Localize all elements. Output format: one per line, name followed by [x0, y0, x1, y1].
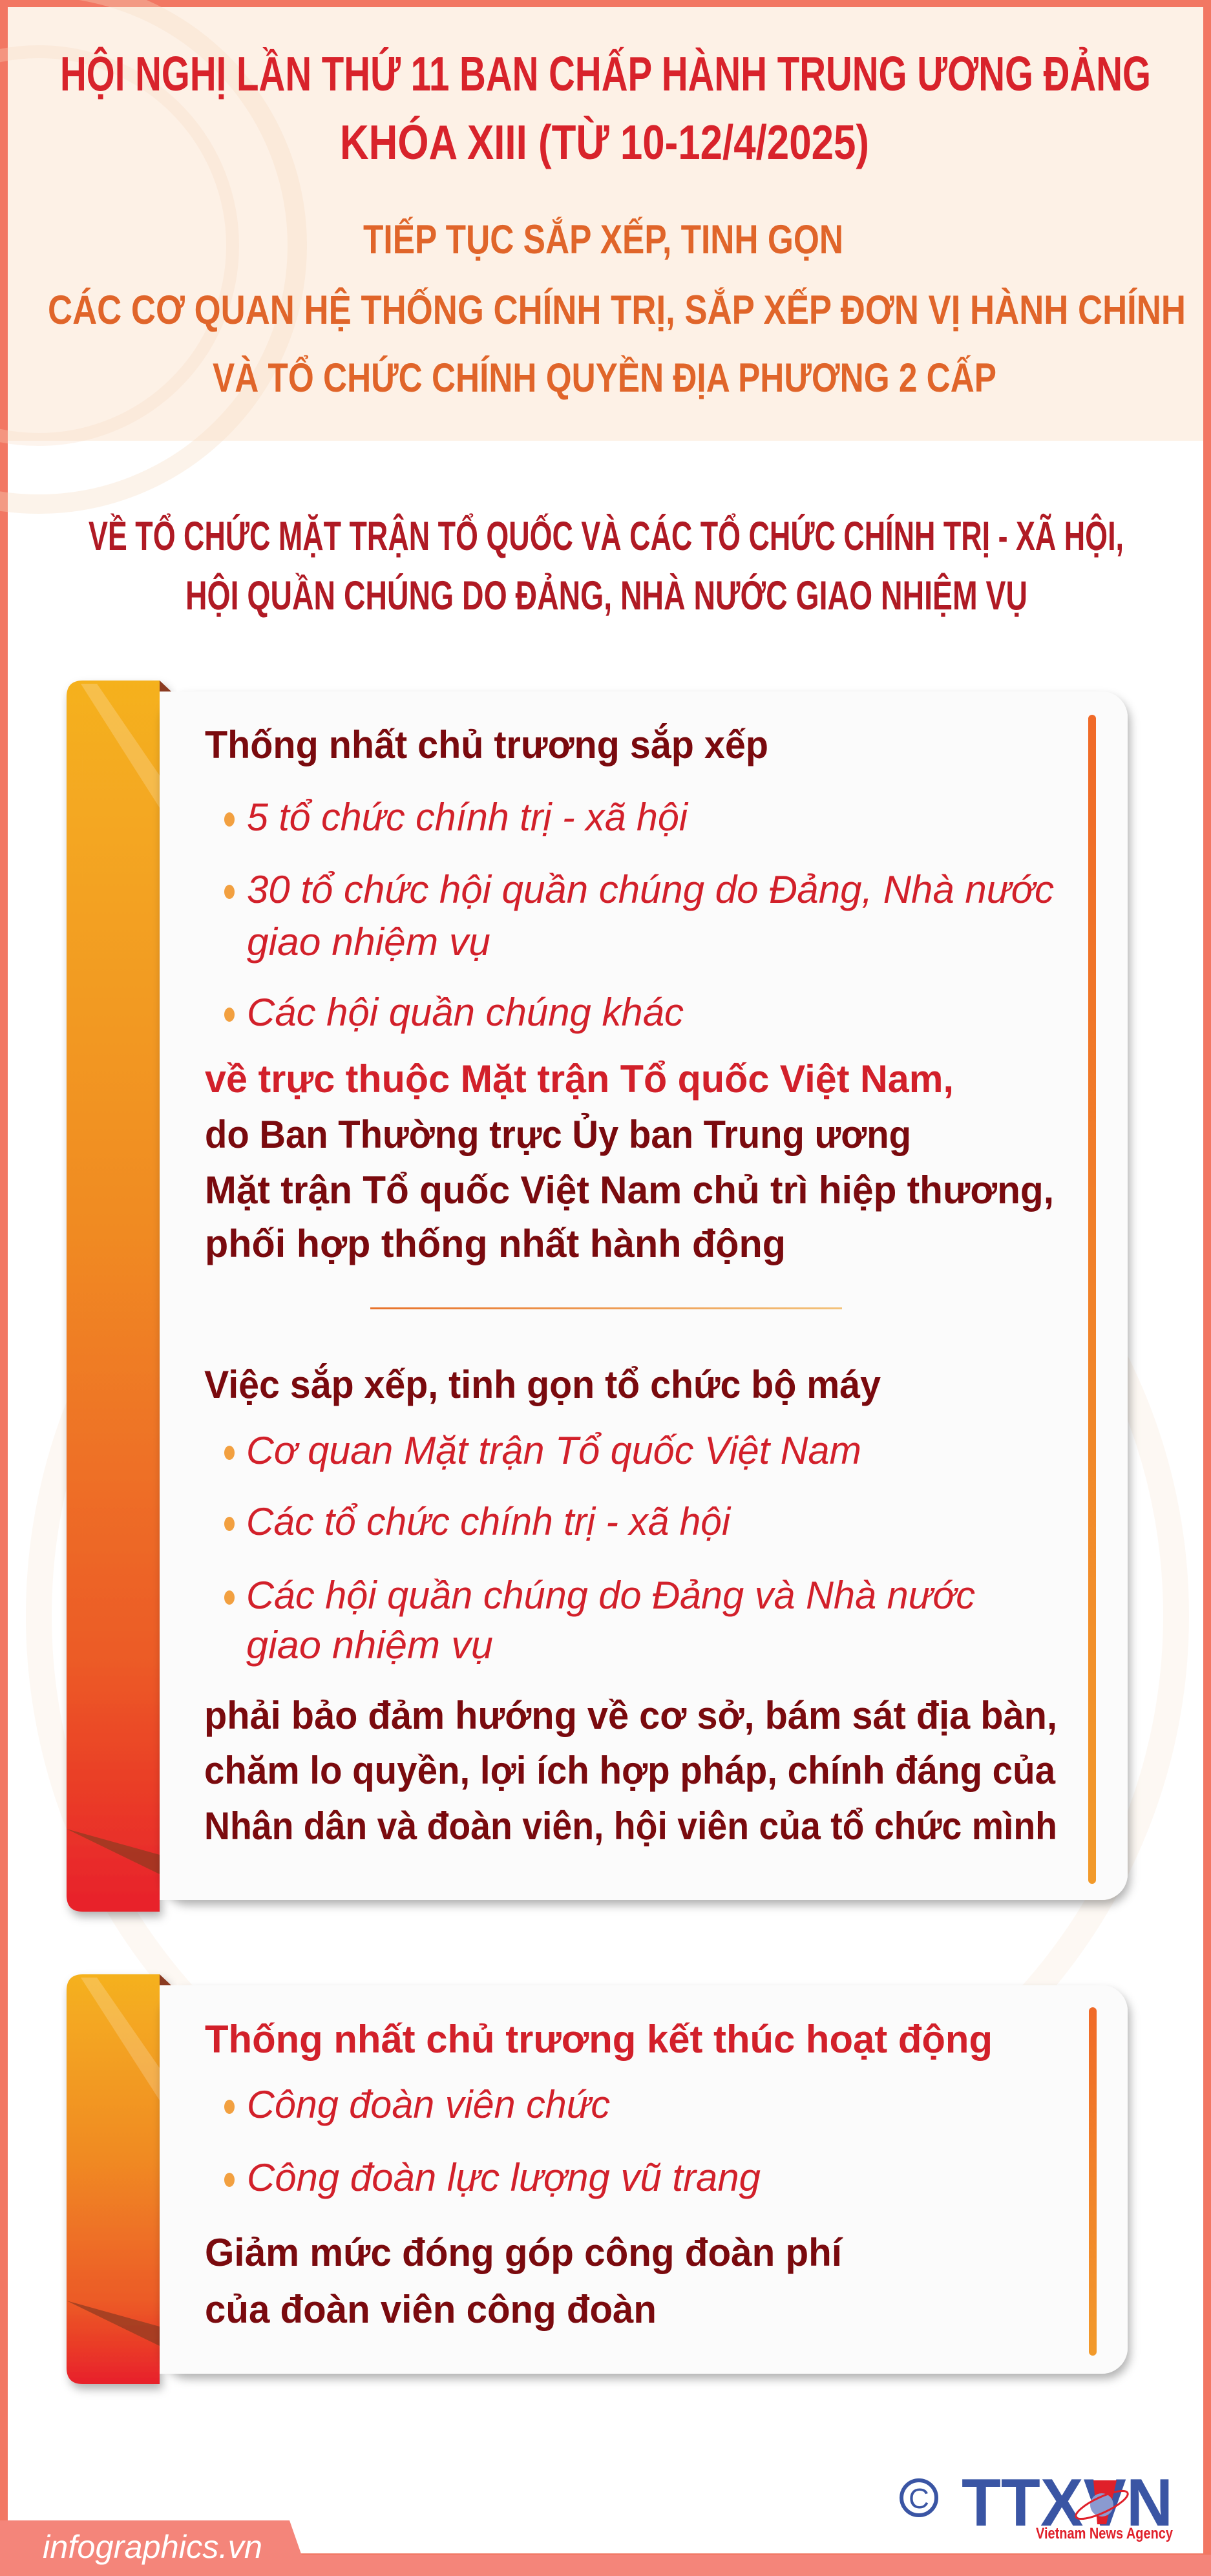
- panel: card 2: [67, 1974, 1128, 2384]
- text block: card 2: của đoàn viên công đoàn: [205, 2288, 657, 2331]
- text block: card 1 part 1: [205, 723, 1054, 1265]
- text block: card 1 part 2: giao nhiệm vụ: [246, 1623, 493, 1667]
- text block: card 1 part 2: Các tổ chức chính trị - xã hội: [246, 1500, 732, 1543]
- text block: card 1 part 1: về trực thuộc Mặt trận Tổ quốc Việt Nam,: [205, 1057, 954, 1101]
- text block: card 1 part 2: Nhân dân và đoàn viên, hội viên của tổ chức mình: [204, 1804, 1057, 1848]
- text block: card 1 part 1: giao nhiệm vụ: [247, 920, 490, 964]
- logo: TTXVN: TTXVN: [962, 2465, 1173, 2540]
- text block: card 2: Thống nhất chủ trương kết thúc hoạt động: [205, 2018, 993, 2061]
- text block: card 2: Công đoàn lực lượng vũ trang: [247, 2156, 761, 2199]
- logo: TTXVN: Vietnam News Agency: [1036, 2525, 1174, 2542]
- section heading: [89, 513, 1124, 618]
- text block: card 1 part 1: 5 tổ chức chính trị - xã hội: [247, 796, 689, 839]
- text block: card 1 part 2: phải bảo đảm hướng về cơ sở, bám sát địa bàn,: [204, 1694, 1057, 1737]
- subtitle: VÀ TỔ CHỨC CHÍNH QUYỀN ĐỊA PHƯƠNG 2 CẤP: [213, 355, 996, 401]
- footer: infographics.vn: [43, 2529, 262, 2565]
- text block: card 1 part 1: phối hợp thống nhất hành động: [205, 1222, 786, 1265]
- text block: card 1 part 2: Các hội quần chúng do Đảng và Nhà nước: [246, 1574, 975, 1617]
- text block: card 1 part 1: Thống nhất chủ trương sắp xếp: [205, 723, 768, 766]
- subtitle: [48, 216, 1186, 401]
- subtitle: TIẾP TỤC SẮP XẾP, TINH GỌN: [363, 216, 843, 262]
- tab 1: [67, 681, 171, 1912]
- text block: card 2: Công đoàn viên chức: [247, 2083, 610, 2126]
- footer: [0, 2520, 1211, 2576]
- text block: card 1 part 2: Việc sắp xếp, tinh gọn tổ chức bộ máy: [204, 1363, 881, 1406]
- text block: card 1 part 1: Các hội quần chúng khác: [247, 991, 684, 1034]
- text block: card 1 part 1: do Ban Thường trực Ủy ban Trung ương: [205, 1113, 911, 1156]
- text block: card 2: Giảm mức đóng góp công đoàn phí: [205, 2231, 843, 2274]
- text block: card 1 part 2: [204, 1363, 1057, 1848]
- text block: card 1 part 2: Cơ quan Mặt trận Tổ quốc Việt Nam: [246, 1429, 861, 1472]
- logo: TTXVN: C: [909, 2483, 929, 2515]
- text block: card 1 part 1: 30 tổ chức hội quần chúng do Đảng, Nhà nước: [247, 868, 1054, 911]
- tab 2: [67, 1974, 171, 2384]
- title: KHÓA XIII (TỪ 10-12/4/2025): [340, 115, 869, 169]
- panel: card 1: [67, 681, 1128, 1912]
- title: [60, 47, 1151, 169]
- text block: card 1 part 2: chăm lo quyền, lợi ích hợp pháp, chính đáng của: [204, 1749, 1056, 1792]
- text block: card 2: [205, 2018, 993, 2331]
- text block: card 1 part 1: Mặt trận Tổ quốc Việt Nam chủ trì hiệp thương,: [205, 1168, 1054, 1212]
